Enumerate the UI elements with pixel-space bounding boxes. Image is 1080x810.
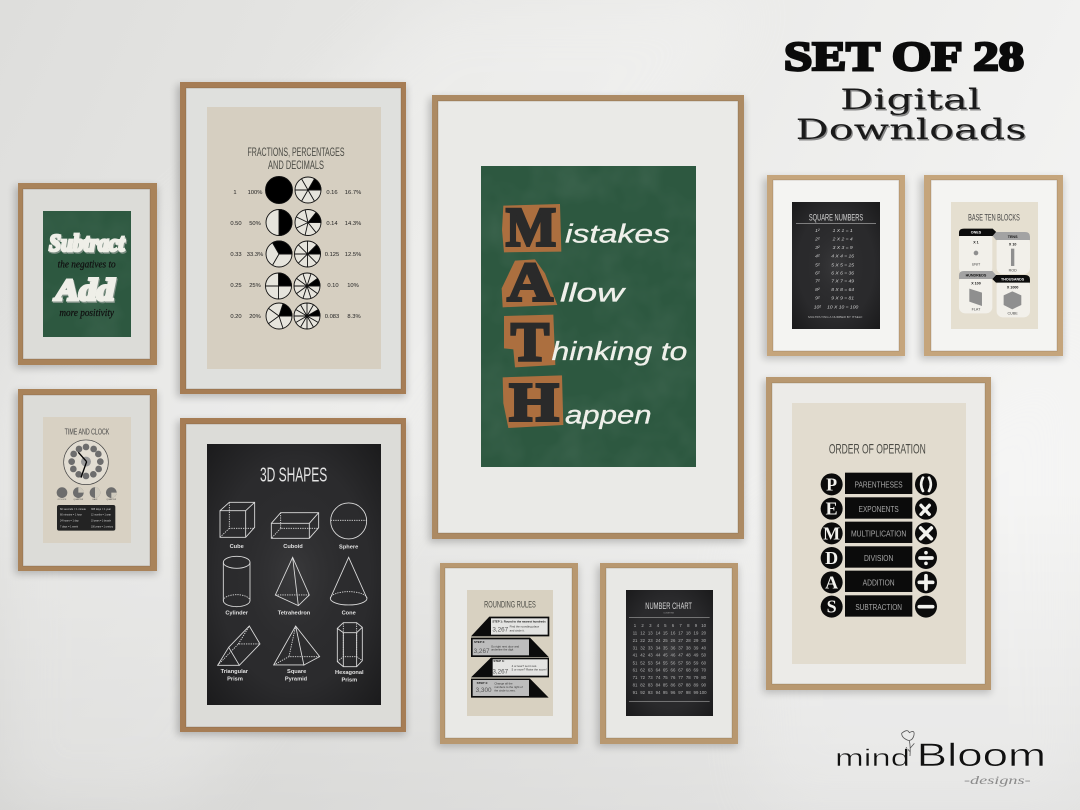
- panel: square numbers poster: 4²: [815, 253, 820, 259]
- fraction labels: 16.7%: [345, 190, 361, 196]
- panel: number chart poster: 24: [656, 638, 661, 643]
- fraction labels: 0.50: [230, 221, 242, 227]
- heading: [248, 147, 345, 172]
- panel: number chart poster: 18: [686, 630, 691, 635]
- panel: number chart poster: 59: [694, 660, 699, 665]
- panel: time and clock poster: HALF: [92, 498, 98, 501]
- panel: time and clock poster: TIME AND CLOCK: [65, 427, 109, 437]
- panel: number chart poster: 82: [640, 683, 646, 688]
- fraction labels: [230, 190, 361, 320]
- fraction labels: 0.25: [230, 283, 242, 289]
- subheading: digital downloads: Digital: [840, 83, 981, 116]
- PEMDAS rows: SUBTRACTION: [855, 603, 902, 612]
- panel: number chart poster: NUMBER CHART: [645, 601, 692, 611]
- panel: number chart poster: 27: [678, 638, 684, 643]
- panel: number chart poster: 36: [671, 645, 676, 650]
- panel: number chart poster: [597, 563, 738, 747]
- panel: base ten blocks poster: FLAT: [972, 308, 981, 312]
- fraction labels: 0.20: [230, 314, 242, 320]
- panel: square numbers poster: 9²: [815, 296, 820, 302]
- subheading: digital downloads: Downloads: [796, 113, 1026, 146]
- panel: number chart poster: 73: [648, 675, 653, 680]
- panel: square numbers poster: 7²: [815, 279, 820, 285]
- panel: time and clock poster: 100 years = 1 century: [91, 526, 114, 529]
- panel: number chart poster: 97: [678, 690, 684, 695]
- panel: number chart poster: 1: [634, 623, 637, 628]
- logo: mind Bloom designs: Bloom: [917, 736, 1046, 773]
- shape labels: Tetrahedron: [278, 611, 311, 617]
- panel: number chart poster: 71: [633, 675, 638, 680]
- panel: number chart poster: 38: [686, 645, 691, 650]
- panel: rounding rules poster: and circle it.: [510, 628, 525, 632]
- panel: number chart poster: 3: [649, 623, 652, 628]
- fraction labels: 25%: [249, 283, 261, 289]
- PEMDAS rows: D: [825, 548, 838, 568]
- fraction labels: 14.3%: [345, 221, 361, 227]
- panel: number chart poster: 15: [663, 630, 668, 635]
- acronym words: hinking to: [552, 336, 687, 366]
- panel: number chart poster: 32: [640, 645, 646, 650]
- panel: square numbers poster: 1²: [815, 228, 820, 234]
- panel: number chart poster: 4: [657, 623, 660, 628]
- panel: number chart poster: 45: [663, 653, 668, 658]
- shape labels: Prism: [227, 677, 243, 683]
- fraction labels: 0.125: [325, 252, 339, 258]
- panel: subtract the negatives poster: more positivity: [59, 308, 114, 319]
- panel: number chart poster: 42: [640, 653, 646, 658]
- panel: number chart poster: 78: [686, 675, 691, 680]
- shape labels: Cone: [342, 611, 356, 617]
- panel: square numbers poster: 5 X 5 = 25: [831, 262, 854, 268]
- PEMDAS rows: DIVISION: [864, 554, 894, 563]
- panel: base ten blocks poster: THOUSANDS: [1001, 277, 1025, 281]
- panel: rounding rules poster: ROUNDING RULES: [484, 600, 536, 610]
- fraction labels: 1: [233, 190, 237, 196]
- panel: number chart poster: 21: [633, 638, 638, 643]
- panel: number chart poster: 33: [648, 645, 653, 650]
- logo: mind Bloom designs: mind: [835, 745, 910, 772]
- panel: subtract the negatives poster: Subtract: [50, 233, 127, 259]
- heading: FRACTIONS, PERCENTAGES: [248, 147, 345, 159]
- panel: number chart poster: 26: [671, 638, 676, 643]
- heading: AND DECIMALS: [268, 160, 324, 172]
- tile letters: M: [506, 197, 556, 258]
- panel: rounding rules poster: STEP 2:: [474, 640, 485, 644]
- panel: number chart poster: 62: [640, 668, 646, 673]
- shape labels: Cylinder: [225, 611, 249, 617]
- panel: base ten blocks poster: X 100: [971, 282, 981, 286]
- tile letters: [506, 197, 559, 433]
- panel: number chart poster: 85: [663, 683, 668, 688]
- panel: rounding rules poster: the circle to zero.: [494, 689, 516, 693]
- panel: rounding rules poster: [437, 563, 578, 747]
- shape outlines: [218, 502, 367, 667]
- panel: number chart poster: 72: [640, 675, 646, 680]
- fraction labels: 0.083: [325, 314, 339, 320]
- acronym words: istakes: [565, 219, 670, 249]
- panel: number chart poster: 9: [695, 623, 698, 628]
- panel: number chart poster: 92: [640, 690, 646, 695]
- panel: number chart poster: 84: [656, 683, 661, 688]
- panel: base ten blocks poster: TENS: [1008, 235, 1018, 239]
- panel: number chart poster: 57: [678, 660, 684, 665]
- icon: flower: [902, 731, 914, 756]
- panel: square numbers poster: 9 X 9 = 81: [831, 296, 854, 302]
- panel: number chart poster: 14: [656, 630, 661, 635]
- panel: time and clock poster: QUARTER: [106, 498, 117, 501]
- shape labels: Prism: [341, 677, 357, 683]
- panel: number chart poster: 81: [633, 683, 638, 688]
- panel: time and clock poster: 24 hours = 1 day: [60, 520, 79, 523]
- panel: base ten blocks poster: CUBE: [1008, 312, 1018, 316]
- panel: MATH acronym poster: [429, 95, 744, 542]
- panel: number chart poster: 69: [694, 668, 699, 673]
- panel: rounding rules poster: STEP 3:: [493, 659, 505, 663]
- panel: square numbers poster: 2 X 2 = 4: [832, 237, 853, 243]
- panel: number chart poster: 40: [701, 645, 707, 650]
- panel: number chart poster: 47: [678, 653, 684, 658]
- panel: time and clock poster: 365 days = 1 year: [91, 508, 111, 511]
- tile letters: H: [509, 372, 559, 433]
- panel: number chart poster: 100: [699, 690, 707, 695]
- panel: number chart poster: 31: [633, 645, 638, 650]
- panel: base ten blocks poster: X 1: [973, 240, 979, 244]
- panel: number chart poster: 67: [678, 668, 684, 673]
- logo: mind Bloom designs: -designs-: [964, 773, 1031, 787]
- PEMDAS rows: ADDITION: [863, 578, 895, 587]
- letter tiles: [502, 204, 563, 428]
- panel: rounding rules poster: 4 or less? Let it rest.: [512, 664, 537, 668]
- panel: square numbers poster: 8 X 8 = 64: [831, 287, 854, 293]
- panel: base ten blocks poster: UNIT: [972, 263, 981, 267]
- panel: number chart poster: 91: [633, 690, 638, 695]
- panel: subtract the negatives poster: Add: [53, 273, 115, 307]
- panel: base ten blocks poster: ROD: [1009, 268, 1017, 272]
- panel: number chart poster: 22: [640, 638, 646, 643]
- panel: rounding rules poster: numbers to the right of: [494, 685, 523, 689]
- panel: square numbers poster: 10²: [814, 304, 821, 310]
- panel: number chart poster: 6: [672, 623, 675, 628]
- panel: number chart poster: 77: [678, 675, 684, 680]
- shape labels: [221, 544, 364, 683]
- panel: number chart poster: 63: [648, 668, 653, 673]
- panel: order of operation poster: [763, 377, 991, 693]
- panel: time and clock poster: O'CLOCK: [58, 499, 67, 501]
- panel: number chart poster: 87: [678, 683, 684, 688]
- panel: base ten blocks poster: HUNDREDS: [966, 273, 987, 277]
- acronym words: llow: [560, 278, 627, 308]
- tile letters: T: [511, 312, 549, 373]
- panel: time and clock poster: 60 minutes = 1 hour: [60, 514, 82, 517]
- panel: subtract the negatives poster: Subtract: [49, 231, 126, 257]
- panel: number chart poster: 61: [633, 668, 638, 673]
- shape labels: Sphere: [339, 544, 358, 550]
- panel: square numbers poster: [763, 175, 905, 359]
- panel: number chart poster: 25: [663, 638, 668, 643]
- panel: number chart poster: 55: [663, 660, 668, 665]
- panel: number chart poster: 50: [701, 653, 707, 658]
- panel: number chart poster: 2: [641, 623, 644, 628]
- panel: number chart poster: 19: [694, 630, 699, 635]
- PEMDAS rows: [821, 473, 937, 618]
- panel: time and clock poster: 7 days = 1 week: [60, 526, 79, 529]
- shape labels: Pyramid: [285, 677, 308, 683]
- panel: rounding rules poster: 3,267: [492, 668, 509, 675]
- shape labels: Cuboid: [283, 544, 303, 550]
- panel: number chart poster: 95: [663, 690, 668, 695]
- fraction labels: 0.16: [326, 190, 338, 196]
- panel: rounding rules poster: underline the digit: [491, 648, 514, 652]
- panel: rounding rules poster: 3,300: [476, 687, 492, 694]
- panel: square numbers poster: 8²: [815, 287, 820, 293]
- panel: rounding rules poster: Go right next door and: [491, 644, 520, 648]
- fraction labels: 50%: [249, 221, 261, 227]
- panel: square numbers poster: 6²: [815, 271, 820, 277]
- panel: number chart poster: 96: [671, 690, 676, 695]
- panel: square numbers poster: 10 X 10 = 100: [827, 304, 858, 310]
- panel: number chart poster: 49: [694, 653, 699, 658]
- PEMDAS rows: E: [826, 499, 838, 519]
- panel: number chart poster: 99: [694, 690, 699, 695]
- fraction labels: 33.3%: [247, 252, 263, 258]
- panel: number chart poster: 39: [694, 645, 699, 650]
- panel: square numbers poster: 3²: [815, 245, 820, 251]
- PEMDAS rows: M: [823, 523, 840, 543]
- panel: number chart poster: 5: [664, 623, 667, 628]
- panel: base ten blocks poster: BASE TEN BLOCKS: [968, 213, 1020, 223]
- fraction labels: 12.5%: [345, 252, 361, 258]
- panel: number chart poster: 76: [671, 675, 676, 680]
- shape labels: Hexagonal: [335, 670, 364, 676]
- fraction labels: 0.10: [327, 283, 339, 289]
- panel: time and clock poster: 10 years = 1 decade: [91, 520, 112, 523]
- panel: base ten blocks poster: X 1000: [1007, 286, 1018, 290]
- panel: number chart poster: 65: [663, 668, 668, 673]
- panel: number chart poster: 44: [656, 653, 661, 658]
- panel: number chart poster: 88: [686, 683, 691, 688]
- panel: number chart poster: 16: [671, 630, 676, 635]
- fraction labels: 0.33: [230, 252, 242, 258]
- panel: number chart poster: 74: [656, 675, 661, 680]
- panel: base ten blocks poster: [920, 175, 1063, 359]
- panel: number chart poster: 35: [663, 645, 668, 650]
- panel: number chart poster: 70: [701, 668, 707, 673]
- panel: number chart poster: 12: [640, 630, 646, 635]
- panel: time and clock poster: 12 months = 1 year: [91, 514, 111, 517]
- panel: square numbers poster: 5²: [815, 262, 820, 268]
- panel: number chart poster: 64: [656, 668, 661, 673]
- fraction pie circles: [266, 176, 321, 329]
- panel: square numbers poster: 3 X 3 = 9: [833, 245, 853, 251]
- panel: number chart poster: 20: [701, 630, 707, 635]
- fraction labels: 20%: [249, 314, 261, 320]
- panel: number chart poster: 93: [648, 690, 653, 695]
- panel: number chart poster: 60: [701, 660, 707, 665]
- subheading: digital downloads: Downloads: [797, 114, 1028, 147]
- panel: number chart poster: 83: [648, 683, 653, 688]
- operator icons: [919, 478, 933, 607]
- panel: number chart poster: 66: [671, 668, 676, 673]
- fraction labels: 100%: [248, 190, 262, 196]
- fraction labels: 0.14: [326, 221, 338, 227]
- panel: time and clock poster: [15, 389, 157, 574]
- panel: rounding rules poster: STEP 1: Round to the nearest hundreds: [492, 620, 546, 624]
- panel: number chart poster: 98: [686, 690, 691, 695]
- shape labels: Cube: [230, 544, 244, 550]
- panel: number chart poster: 13: [648, 630, 653, 635]
- panel: number chart poster: 43: [648, 653, 653, 658]
- panel: number chart poster: 58: [686, 660, 691, 665]
- panel: square numbers poster: 4 X 4 = 16: [831, 253, 854, 259]
- panel: square numbers poster: MULTIPLYING A NUMBER BY ITSELF: [808, 315, 863, 319]
- PEMDAS rows: P: [826, 474, 837, 494]
- panel: square numbers poster: 7 X 7 = 49: [831, 279, 854, 285]
- panel: subtract the negatives poster: [15, 183, 157, 368]
- acronym words: [552, 219, 687, 429]
- panel: time and clock poster: 60 seconds = 1 minute: [60, 508, 87, 511]
- panel: number chart poster: 10: [701, 623, 707, 628]
- panel: square numbers poster: 6 X 6 = 36: [831, 271, 854, 277]
- panel: rounding rules poster: STEP 4:: [477, 681, 488, 685]
- heading: 3D SHAPES: [260, 465, 327, 487]
- panel: number chart poster: 34: [656, 645, 661, 650]
- shape labels: Triangular: [221, 669, 249, 675]
- panel: base ten blocks poster: ONES: [971, 231, 982, 235]
- panel: number chart poster: 11: [633, 630, 638, 635]
- panel: rounding rules poster: 3,267: [474, 648, 490, 655]
- acronym words: appen: [565, 399, 652, 429]
- PEMDAS rows: A: [825, 572, 838, 592]
- fraction labels: 10%: [347, 283, 359, 289]
- panel: 3D shapes poster: [177, 418, 406, 735]
- subheading: digital downloads: [796, 83, 1028, 147]
- panel: number chart poster: 28: [686, 638, 691, 643]
- panel: rounding rules poster: 5 or more? Raise the score!: [512, 667, 547, 671]
- panel: number chart poster: 79: [694, 675, 699, 680]
- panel: number chart poster: COUNTING: [663, 612, 674, 614]
- panel: number chart poster: 94: [656, 690, 661, 695]
- panel: rounding rules poster: Find the rounding place: [510, 625, 540, 629]
- panel: number chart poster: 30: [701, 638, 707, 643]
- panel: number chart poster: 17: [678, 630, 684, 635]
- fraction labels: 8.3%: [347, 314, 361, 320]
- panel: square numbers poster: SQUARE NUMBERS: [809, 213, 863, 223]
- panel: number chart poster: 48: [686, 653, 691, 658]
- logo: mind Bloom designs: [835, 731, 1046, 787]
- shape labels: Square: [287, 669, 306, 675]
- panel: number chart poster: 90: [701, 683, 707, 688]
- panel: number chart poster: 86: [671, 683, 676, 688]
- panel: number chart poster: 29: [694, 638, 699, 643]
- tile letters: A: [507, 252, 553, 313]
- panel: time and clock poster: QUARTER: [73, 498, 84, 501]
- panel: square numbers poster: 2²: [814, 237, 820, 243]
- panel: number chart poster: 54: [656, 660, 661, 665]
- heading: ORDER OF OPERATION: [829, 440, 926, 456]
- panel: number chart poster: 8: [687, 623, 690, 628]
- panel: number chart poster: 23: [648, 638, 653, 643]
- PEMDAS rows: MULTIPLICATION: [851, 529, 907, 538]
- panel: number chart poster: 80: [701, 675, 707, 680]
- panel: number chart poster: 51: [633, 660, 638, 665]
- panel: number chart poster: 46: [671, 653, 676, 658]
- subheading: digital downloads: Digital: [841, 84, 982, 117]
- PEMDAS rows: PARENTHESES: [855, 480, 903, 489]
- panel: number chart poster: 41: [633, 653, 638, 658]
- panel: number chart poster: 53: [648, 660, 653, 665]
- panel: rounding rules poster: Change all the: [494, 682, 513, 686]
- heading: set of 28: SET OF 28: [784, 33, 1024, 79]
- panel: fractions percentages and decimals poster: [177, 82, 406, 397]
- panel: base ten blocks poster: X 10: [1009, 243, 1016, 247]
- panel: number chart poster: 68: [686, 668, 691, 673]
- panel: number chart poster: 56: [671, 660, 676, 665]
- panel: number chart poster: 52: [640, 660, 646, 665]
- panel: subtract the negatives poster: the negatives to: [58, 260, 116, 271]
- panel: subtract the negatives poster: Add: [54, 275, 116, 309]
- PEMDAS rows: EXPONENTS: [859, 505, 899, 514]
- panel: rounding rules poster: 3,267: [492, 626, 509, 633]
- panel: number chart poster: 7: [679, 623, 682, 628]
- panel: number chart poster: 89: [694, 683, 699, 688]
- panel: number chart poster: 37: [678, 645, 684, 650]
- PEMDAS rows: S: [827, 597, 837, 617]
- panel: number chart poster: 75: [663, 675, 668, 680]
- panel: square numbers poster: 1 X 1 = 1: [833, 228, 853, 234]
